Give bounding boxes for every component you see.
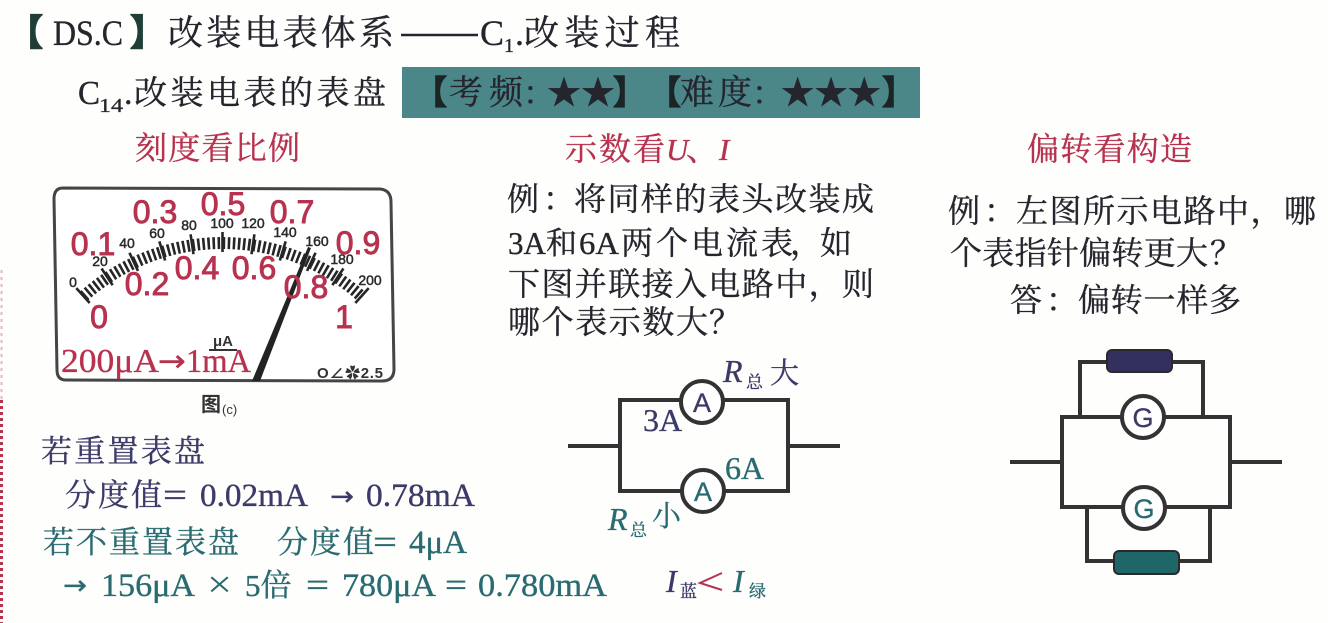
scale numbers in microamps: 180 <box>330 251 354 267</box>
frequency and difficulty banner: ： <box>523 75 555 111</box>
frequency and difficulty banner: 考频 <box>449 74 524 112</box>
wires <box>1010 362 1282 561</box>
meter class mark: O∠✿2.5 <box>317 365 383 382</box>
subtitle: C <box>78 75 100 112</box>
title: 【 <box>7 4 43 56</box>
calculation notes: 若重置表盘 <box>41 434 205 469</box>
figure caption <box>201 394 237 417</box>
range conversion label: 1mA <box>186 343 251 380</box>
current comparison: I <box>665 563 678 599</box>
calculation notes: 0.780mA <box>478 568 607 604</box>
meter dial <box>54 186 394 417</box>
example text: deflection: 个表指针偏转更大 <box>950 235 1208 271</box>
example text: reading: ， <box>790 225 822 261</box>
range conversion label: → <box>158 344 186 379</box>
upper shunt resistor <box>1107 350 1172 372</box>
ammeter green <box>682 470 724 512</box>
scale numbers in microamps: 80 <box>181 217 197 233</box>
calculation notes: → <box>63 571 87 601</box>
example text: reading: ？ <box>709 304 741 340</box>
red milliamp labels: 0.9 <box>336 225 380 261</box>
heading: reading <box>565 131 731 167</box>
calculation notes: 4μA <box>409 525 467 561</box>
calculation notes: × <box>207 564 232 606</box>
label large total resistance <box>722 353 799 392</box>
heading: reading: 示数看 <box>565 131 665 167</box>
label 6A: 6A <box>725 450 764 486</box>
heading: scale proportion: 刻度看比例 <box>135 130 300 166</box>
range conversion label: 200μA <box>61 343 159 380</box>
ammeter green: A <box>694 477 712 507</box>
title <box>7 4 680 57</box>
label small total resistance: 总 <box>630 521 648 540</box>
calculation notes: = <box>306 568 329 604</box>
scale numbers in microamps: 20 <box>92 253 108 269</box>
example text: deflection: 偏转一样多 <box>1078 282 1241 318</box>
scale numbers in microamps: 100 <box>210 215 234 231</box>
calculation notes: = <box>163 478 187 514</box>
figure caption: 图 <box>201 394 221 416</box>
lower galvanometer <box>1123 487 1165 529</box>
figure caption: (c) <box>222 402 237 417</box>
red milliamp labels: 0 <box>90 299 108 335</box>
example text: reading: 下图并联接入电路中，则 <box>508 266 874 302</box>
label large total resistance: 大 <box>770 357 799 390</box>
example text: reading: 6A <box>579 225 619 261</box>
frequency and difficulty banner: ： <box>752 75 784 111</box>
title: C <box>480 13 504 53</box>
label small total resistance <box>607 500 682 540</box>
title: 】 <box>130 4 166 56</box>
scale numbers in microamps: 120 <box>241 215 265 231</box>
range conversion label <box>61 343 251 380</box>
heading: deflection: 偏转看构造 <box>1027 131 1192 167</box>
calculation notes: 156μA <box>101 568 195 604</box>
example text: deflection: ？ <box>1210 235 1242 271</box>
example text: reading: 3A <box>508 225 546 261</box>
example text: reading: ： <box>543 181 575 217</box>
red milliamp labels: 0.2 <box>125 266 169 302</box>
lower shunt resistor <box>1114 551 1179 574</box>
example text: deflection: 答 <box>1010 282 1042 318</box>
subtitle: 改装电表的表盘 <box>134 75 386 112</box>
calculation notes: = <box>373 525 397 561</box>
example text: deflection: ： <box>984 193 1016 229</box>
red milliamp labels <box>71 186 380 335</box>
current comparison: 绿 <box>749 582 766 601</box>
ammeter blue <box>681 381 723 423</box>
needle <box>252 247 311 381</box>
subtitle: 14 <box>99 95 123 117</box>
example text: reading: 两个电流表 <box>621 225 793 261</box>
calculation notes: 分度值 <box>277 525 374 560</box>
frequency and difficulty banner: 难度 <box>680 74 752 112</box>
calculation notes: 780μA <box>342 568 436 604</box>
frequency and difficulty banner: ★★ <box>547 76 615 112</box>
ammeter circuit <box>568 353 840 540</box>
red milliamp labels: 0.5 <box>201 186 245 222</box>
scale numbers in microamps: 0 <box>69 274 77 290</box>
red milliamp labels: 0.7 <box>270 194 314 230</box>
example text: reading: 和 <box>546 226 577 261</box>
calculation notes: → <box>330 482 354 512</box>
current comparison: 蓝 <box>680 581 697 601</box>
wires <box>568 400 840 491</box>
example text: deflection: ： <box>1046 282 1078 318</box>
meter frame <box>54 188 394 381</box>
red milliamp labels: 1 <box>335 299 353 335</box>
galvanometer circuit <box>1010 350 1282 574</box>
red milliamp labels: 0.6 <box>232 250 276 286</box>
scale numbers in microamps: 40 <box>119 235 135 251</box>
scale numbers in microamps: 140 <box>273 224 297 240</box>
label small total resistance: 小 <box>652 500 682 533</box>
example text: deflection: 左图所示电路中，哪 <box>1016 193 1316 229</box>
calculation notes: 0.02mA <box>200 478 308 514</box>
upper galvanometer <box>1122 396 1164 438</box>
red milliamp labels: 0.4 <box>175 250 219 286</box>
calculation notes: 0.78mA <box>366 478 475 514</box>
title: . <box>515 13 524 53</box>
red milliamp labels: 0.1 <box>71 226 115 262</box>
example text: reading <box>507 181 874 340</box>
calculation notes: 分度值 <box>65 478 162 513</box>
calculation notes: 5倍 <box>245 568 292 603</box>
scale numbers in microamps: 200 <box>358 272 382 288</box>
frequency and difficulty banner: 】 <box>882 66 915 114</box>
title: DS.C <box>53 13 123 53</box>
scale numbers in microamps: 160 <box>305 233 329 249</box>
red milliamp labels: 0.3 <box>133 194 177 230</box>
frequency and difficulty banner: 】 <box>613 66 646 114</box>
ammeter blue: A <box>693 388 711 418</box>
example text: reading: 哪个表示数大 <box>508 304 708 340</box>
scale ticks <box>76 232 369 303</box>
label large total resistance: 总 <box>746 373 764 392</box>
example text: deflection: 例 <box>948 193 980 229</box>
frequency and difficulty banner: ★★★ <box>781 76 881 112</box>
example text: reading: 例 <box>507 181 539 217</box>
heading: reading: 、 <box>686 131 718 167</box>
scale numbers in microamps: 60 <box>149 225 165 241</box>
calculation notes <box>41 434 607 606</box>
label small total resistance: R <box>607 501 628 537</box>
label 3A: 3A <box>643 402 682 438</box>
scale numbers in microamps <box>69 215 382 290</box>
heading: reading: U <box>666 132 691 167</box>
upper galvanometer: G <box>1132 403 1154 433</box>
frequency and difficulty banner: 【 <box>414 66 447 114</box>
red milliamp labels: 0.8 <box>284 269 328 305</box>
frequency and difficulty banner: 【 <box>648 66 681 114</box>
example text: reading: 如 <box>820 225 852 261</box>
current comparison <box>665 563 766 601</box>
subtitle: . <box>124 75 132 112</box>
frequency and difficulty banner <box>402 66 920 118</box>
unit symbol: μA <box>213 333 233 350</box>
calculation notes: = <box>445 568 467 604</box>
example text: deflection <box>948 193 1316 318</box>
heading: reading: I <box>718 132 731 167</box>
current comparison: I <box>732 563 745 599</box>
calculation notes: 若不重置表盘 <box>43 525 239 560</box>
lower galvanometer: G <box>1133 494 1155 524</box>
label large total resistance: R <box>722 353 743 389</box>
title: 改装电表体系 <box>168 14 394 53</box>
example text: reading: 将同样的表头改装成 <box>574 181 874 217</box>
title: 改装过程 <box>524 14 680 53</box>
title: 1 <box>504 35 514 57</box>
